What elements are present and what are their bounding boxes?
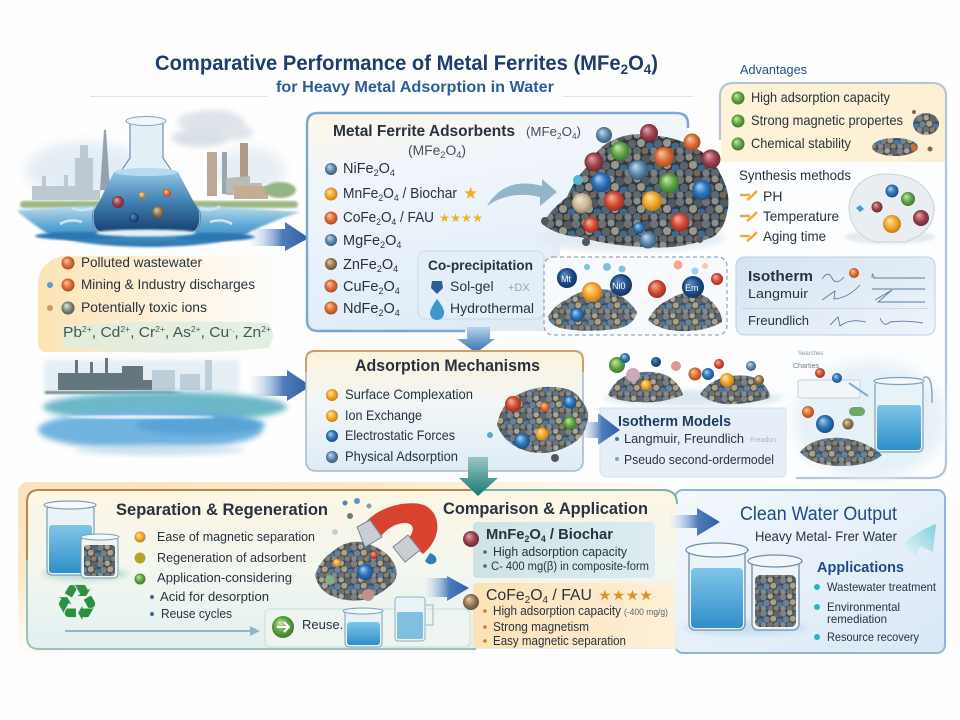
mini particle clusters (872, 110, 939, 156)
arrow: comparison to clean water (670, 508, 720, 536)
heading suffix formula: 2 (557, 132, 562, 141)
item: PH: PH (763, 188, 782, 204)
text: ion list: , Cd (92, 325, 120, 341)
box: isotherm models (600, 408, 786, 477)
box: CoFe2O4 FAU (463, 583, 675, 648)
item: NiFe2O4: NiFe (343, 161, 374, 177)
item: environmental remediation: Environmental (827, 600, 900, 614)
item: MnFe2O4 / Biochar: 2 (378, 193, 383, 203)
heading: metal ferrite adsorbents: Metal Ferrite Adsorbents (333, 123, 515, 140)
illustration: ferrite particle pile (535, 124, 728, 252)
heading: MnFe2O4 biochar: 4 (541, 534, 546, 544)
heading suffix formula: 4 (572, 132, 577, 141)
labelled ball Mt: Mt (561, 274, 571, 284)
text: ion list: , As (165, 325, 191, 341)
panel: pollution sources (38, 254, 273, 353)
heading: adsorption mechanisms: Adsorption Mechanisms (355, 357, 540, 375)
item: NdFe2O4 (324, 301, 400, 318)
labelled ball Em: Em (685, 283, 698, 293)
labelled ball Ni0: Ni0 (612, 281, 626, 291)
arrow: mechanisms to isotherm models (580, 413, 620, 445)
item: CuFe2O4: 4 (395, 286, 400, 296)
panel: metal ferrite adsorbents (306, 112, 688, 331)
subheading formula: 4 (456, 150, 461, 160)
item: aging time: Aging time (763, 228, 826, 244)
box: synthesis routes: Co-precipitation (428, 257, 533, 273)
heading: separation and regeneration: Separation & Regeneration (116, 500, 328, 519)
text: ion list: Pb (63, 325, 81, 341)
ball maroon (463, 531, 479, 547)
item: MnFe2O4 / Biochar: ★ (463, 184, 478, 204)
illustration: adsorption site particles (603, 353, 783, 406)
item: ease of magnetic separation: Ease of magnetic separation (157, 529, 315, 544)
ball bronze (463, 594, 479, 610)
item: MnFe2O4 / Biochar: MnFe (343, 186, 380, 202)
item: CoFe2O4 / FAU: 2 (376, 217, 381, 227)
item: CuFe2O4: 2 (378, 286, 383, 296)
text: ion list: , Cr (130, 325, 155, 341)
box: isotherm: Langmuir (748, 286, 809, 301)
box: dashed particle close-up (544, 257, 727, 335)
bottom container: cream outer band (18, 482, 678, 654)
item: easy magnetic separation: Easy magnetic separation (493, 634, 626, 648)
subheading formula: O (445, 143, 456, 158)
arrow: curved arrow to ferrite pile (487, 179, 557, 206)
subheading formula: 2 (440, 150, 445, 160)
item: MgFe2O4: 2 (380, 240, 385, 250)
box: MnFe2O4 biochar (463, 522, 655, 578)
heading: isotherm models: Isotherm Models (618, 413, 731, 430)
item: wastewater treatment: Wastewater treatment (827, 580, 937, 594)
item: MnFe2O4 / Biochar: 4 (394, 193, 399, 203)
box: isotherm: Isotherm (748, 268, 813, 285)
item: high capacity: High adsorption capacity (493, 544, 627, 559)
illustration: beaker with adsorbent (42, 501, 128, 581)
sub item: reuse cycles: Reuse cycles (161, 606, 232, 621)
title: O (628, 52, 644, 75)
item: MgFe2O4: 4 (396, 240, 401, 250)
item: NdFe2O4: O (383, 301, 395, 317)
illustration: particles in mechanisms panel (487, 387, 588, 462)
item: physical adsorption: Physical Adsorption (345, 448, 458, 464)
title: for Heavy Metal Adsorption in Water (276, 79, 554, 96)
panel: advantages heading: Advantages (740, 62, 807, 77)
item: MgFe2O4: MgFe (343, 233, 380, 249)
item: MgFe2O4: O (385, 233, 396, 249)
item: langmuir freundlich: Langmuir, Freundlich (624, 431, 744, 446)
ball red (648, 280, 666, 298)
heading: MnFe2O4 biochar: MnFe (486, 526, 525, 543)
item: application considering: Application-considering (157, 570, 292, 585)
box: synthesis routes: Hydrothermal (450, 300, 534, 316)
illustration: clean water beakers (683, 543, 807, 635)
item: CoFe2O4 / FAU: O (381, 210, 392, 226)
item: ZnFe2O4: 2 (377, 264, 382, 274)
panel: right column (720, 83, 946, 478)
heading: comparison and application: Comparison & Application (443, 499, 648, 518)
labelled ball Mt (557, 268, 577, 288)
item: surface complexation: Surface Complexation (345, 386, 473, 402)
item: NiFe2O4: 4 (390, 168, 395, 178)
rating stars: ★★★★ (598, 588, 653, 604)
small particles (570, 260, 723, 322)
particle piles (548, 289, 722, 331)
title (90, 52, 693, 97)
labelled ball Ni0 (610, 274, 632, 296)
item: ion exchange: Ion Exchange (345, 407, 422, 423)
box: reuse (265, 597, 470, 647)
arrow: polluted water to adsorbents (250, 222, 309, 251)
arrow: shoreline to mechanisms (250, 370, 311, 401)
item: NdFe2O4: 4 (395, 308, 400, 318)
item: NdFe2O4: NdFe (343, 301, 378, 317)
heading: CoFe2O4 FAU: CoFe (486, 587, 525, 604)
text: ion list: 2+ (120, 325, 130, 334)
panel: adsorption mechanisms (306, 351, 583, 471)
item: ZnFe2O4: ZnFe (343, 257, 377, 273)
item: langmuir freundlich: Freadun (750, 437, 776, 444)
item: CuFe2O4 (324, 279, 400, 296)
item: NiFe2O4 (325, 161, 395, 178)
item: CuFe2O4: O (383, 279, 395, 295)
item: ZnFe2O4: O (382, 257, 393, 273)
item: temperature: Temperature (763, 208, 839, 224)
item: electrostatic forces: Electrostatic Forces (345, 427, 455, 443)
item: strong magnetic properties: Strong magnetic propertes (751, 112, 903, 128)
item: CoFe2O4 / FAU: ★★★★ (439, 211, 483, 225)
heading: MnFe2O4 biochar: / Biochar (546, 526, 613, 543)
title: Comparative Performance of Metal Ferrites (MFe (155, 52, 639, 75)
item: pseudo second order: Pseudo second-ordermodel (624, 452, 774, 467)
title: 4 (644, 61, 651, 77)
icon: recycle: ♻ (55, 574, 99, 632)
item: NiFe2O4: O (379, 161, 390, 177)
subheading formula: ) (461, 143, 466, 158)
labelled ball Em (682, 276, 704, 298)
text: mining: Mining & Industry discharges (81, 276, 255, 292)
box: isotherm: Freundlich (748, 313, 809, 328)
heading: synthesis methods: Synthesis methods (739, 167, 851, 183)
text: toxic ions: Potentially toxic ions (81, 299, 207, 315)
text: ion list: 2+ (261, 325, 271, 334)
title: 2 (621, 61, 628, 77)
ball amber (582, 282, 602, 302)
panel: separation and comparison (27, 457, 720, 649)
item: 400 mg composite: C- 400 mg(β) in composite-form (491, 561, 649, 573)
heading: CoFe2O4 FAU: 2 (525, 595, 531, 606)
heading: CoFe2O4 FAU: O (530, 587, 543, 604)
illustration: ferrite particle in glass sphere (845, 174, 935, 244)
item: CuFe2O4: CuFe (343, 279, 378, 295)
heading: CoFe2O4 FAU: 4 (543, 595, 548, 606)
item: MnFe2O4 / Biochar: / Biochar (399, 186, 457, 202)
bullet: polluted wastewater (62, 256, 74, 270)
box: synthesis routes: +DX (508, 282, 530, 294)
advantages background (721, 84, 945, 162)
box: synthesis routes (418, 251, 544, 320)
item: PH (740, 188, 782, 204)
ion ribbon background (63, 321, 273, 353)
item: high capacity: (-400 mg/g) (624, 607, 668, 617)
item: high capacity: High adsorption capacity (493, 604, 622, 618)
item: regeneration of adsorbent: Regeneration of adsorbent (157, 550, 306, 565)
panel: clean water output (675, 490, 945, 653)
heading: MnFe2O4 biochar: O (529, 526, 541, 543)
illustration: lab beaker and particles: Charties (793, 363, 820, 370)
item: chemical stability: Chemical stability (751, 135, 851, 151)
illustration: magnet with particles (315, 498, 437, 601)
bullets: toxic ions (47, 302, 74, 314)
item: MnFe2O4 / Biochar: O (383, 186, 394, 202)
text: ion list: 2+ (191, 325, 201, 334)
item: MgFe2O4 (325, 233, 401, 250)
arrow: to comparison (425, 576, 469, 601)
item: CoFe2O4 / FAU (324, 210, 483, 227)
illustration: lab beaker and particles: Searches (798, 351, 823, 357)
heading: applications: Applications (817, 559, 904, 576)
box: reuse: Reuse. (302, 617, 343, 632)
sub item: acid for desorption: Acid for desorption (160, 589, 269, 604)
text: ion list: , Zn (234, 325, 261, 341)
text: polluted wastewater: Polluted wastewater (81, 254, 202, 270)
item: high adsorption capacity: High adsorption capacity (751, 89, 890, 105)
illustration: industrial shoreline water (38, 358, 287, 455)
item: ZnFe2O4 (325, 257, 398, 274)
item: environmental remediation (814, 600, 900, 626)
text: ion list: 2+ (155, 325, 165, 334)
box: synthesis routes: Sol-gel (450, 278, 494, 294)
heading suffix formula: O (562, 124, 572, 139)
item: NdFe2O4: 2 (378, 308, 383, 318)
heading suffix formula: (MFe (526, 124, 556, 139)
item: CoFe2O4 / FAU: 4 (392, 217, 396, 227)
item: ZnFe2O4: 4 (393, 264, 398, 274)
icon: water splash (904, 524, 936, 556)
heading: clean water output: Clean Water Output (740, 504, 898, 525)
heading suffix formula: ) (577, 124, 581, 139)
item: CoFe2O4 / FAU: / FAU (396, 210, 434, 226)
arrow: ferrites down to mechanisms (457, 327, 495, 353)
title: ) (651, 52, 658, 75)
item: NiFe2O4: 2 (374, 168, 379, 178)
illustration: flask in polluted water with industry (18, 110, 300, 247)
subheading: heavy metal free water: Heavy Metal- Frer Water (755, 529, 897, 544)
arrow: mechanisms down to comparison (459, 457, 498, 496)
item: resource recovery: Resource recovery (827, 630, 919, 644)
heading: CoFe2O4 FAU: / FAU (548, 587, 592, 604)
text: ion list: , Cu (201, 325, 229, 341)
heading: MnFe2O4 biochar: 2 (524, 534, 529, 544)
item: MnFe2O4 / Biochar (324, 184, 478, 204)
text: ion list: -. (229, 325, 234, 334)
item: environmental remediation: remediation (827, 612, 887, 626)
subheading formula: (MFe (408, 143, 440, 158)
item: strong magnetism: Strong magnetism (493, 620, 589, 634)
bullets: mining (47, 278, 74, 292)
text: ion list: 2+ (82, 325, 92, 334)
arrow: to reuse (65, 626, 260, 636)
illustration: lab beaker and particles (793, 351, 945, 478)
item: CoFe2O4 / FAU: CoFe (343, 210, 378, 226)
box: isotherm (736, 257, 935, 335)
